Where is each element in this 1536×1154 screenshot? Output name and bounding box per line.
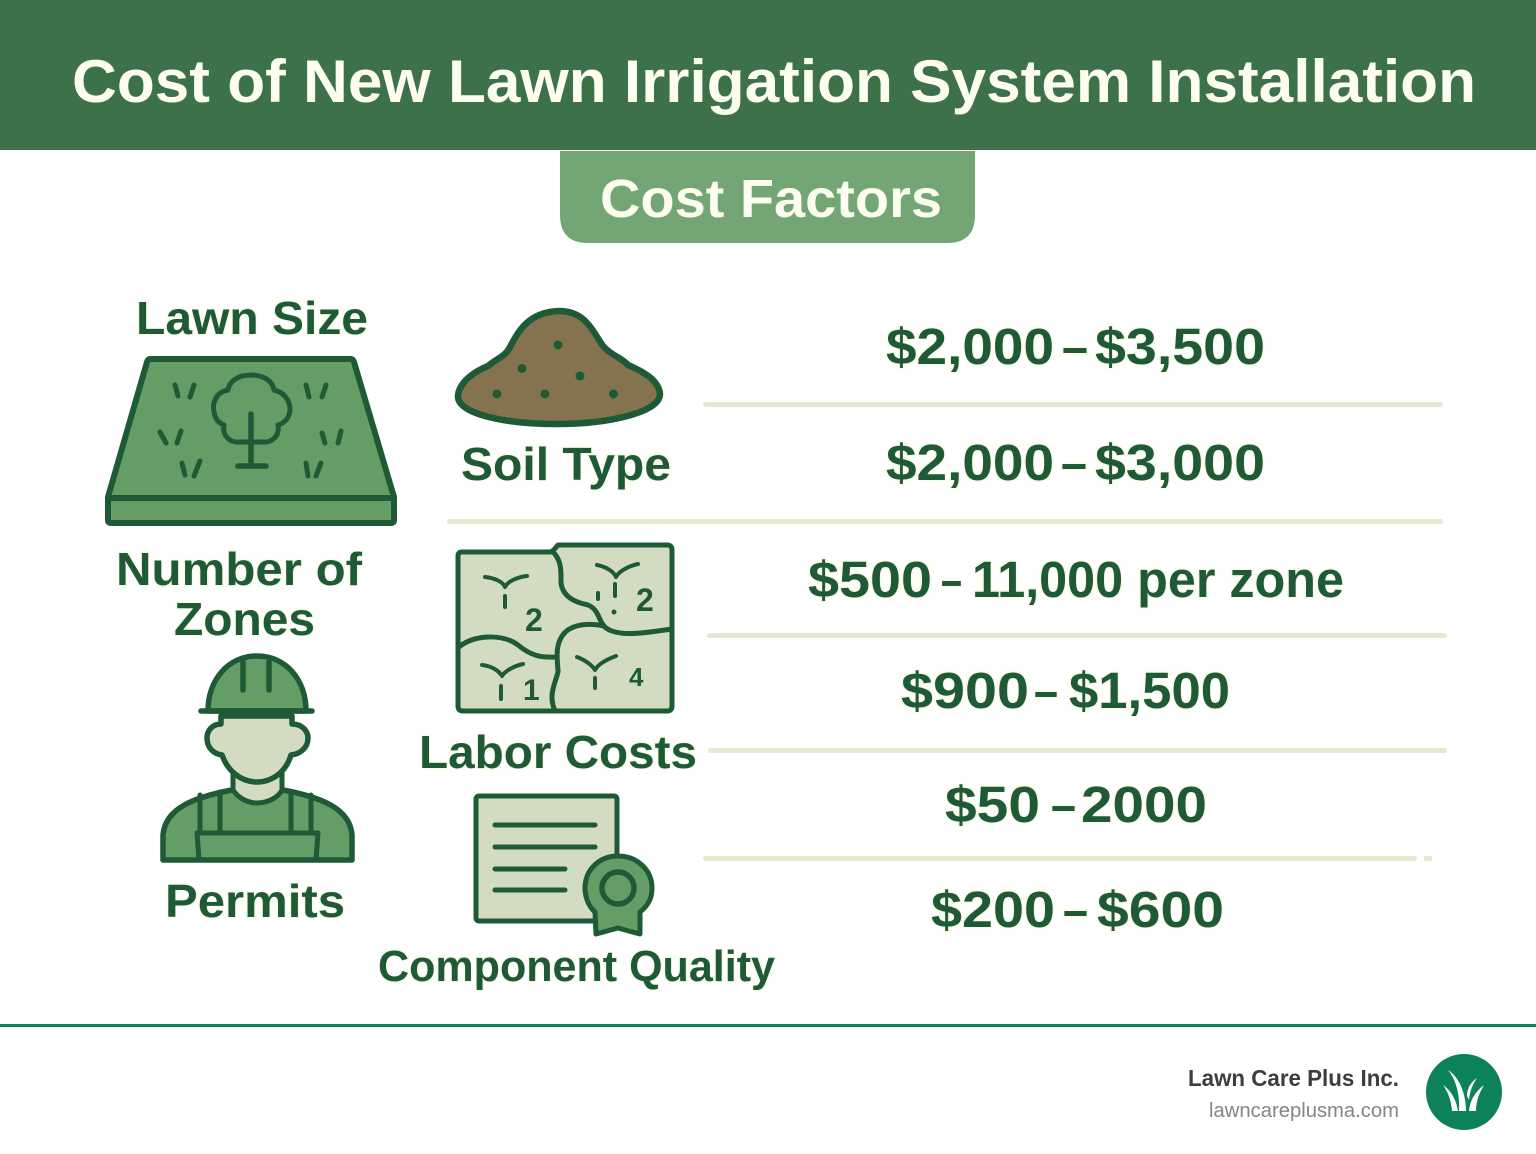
price: component quality: $600 (1097, 881, 1224, 938)
price: number of zones: $500 (808, 551, 932, 608)
icon: zone map (458, 545, 672, 711)
icon: brand logo (1426, 1054, 1502, 1130)
zone numbers: 1 (523, 674, 540, 707)
price: soil type: – (1061, 434, 1087, 491)
zone numbers (523, 582, 654, 707)
price: component quality (931, 881, 1224, 938)
price: labor costs: $900 (901, 662, 1029, 719)
footer brand text: Lawn Care Plus Inc. (1188, 1065, 1399, 1091)
price: lawn size: $3,500 (1095, 318, 1265, 375)
body (163, 790, 352, 860)
label: labor costs: Labor Costs (419, 726, 697, 778)
label: number of zones: Zones (174, 593, 315, 645)
grass tufts (160, 385, 341, 476)
subheading pill: cost factors: Cost Factors (600, 169, 942, 229)
zone numbers: 2 (636, 582, 654, 618)
price: lawn size (886, 318, 1265, 375)
price: number of zones: 11,000 per zone (972, 551, 1344, 608)
price: labor costs: $1,500 (1069, 662, 1230, 719)
price: lawn size: – (1062, 318, 1088, 375)
price: permits (945, 776, 1207, 833)
title: Cost of New Lawn Irrigation System Installation (72, 48, 1476, 115)
label: component quality: Component Quality (378, 942, 776, 991)
price: permits: 2000 (1081, 776, 1207, 833)
subheading pill: cost factors (560, 151, 975, 243)
price: permits: $50 (945, 776, 1040, 833)
price: component quality: $200 (931, 881, 1055, 938)
zone numbers: 4 (629, 662, 644, 692)
icon: certificate with seal (476, 796, 652, 934)
price: permits: – (1051, 776, 1076, 833)
footer brand text (1188, 1065, 1399, 1122)
header banner (0, 0, 1536, 150)
icon: soil pile (458, 311, 660, 424)
price: soil type: $3,000 (1095, 434, 1265, 491)
label: permits: Permits (165, 875, 345, 927)
price: soil type: $2,000 (886, 434, 1054, 491)
price: labor costs: – (1034, 662, 1058, 719)
price: number of zones (808, 551, 1344, 608)
label: number of zones (116, 543, 363, 645)
label: lawn size: Lawn Size (136, 292, 368, 344)
icon: lawn plot with tree (108, 359, 394, 523)
footer brand text: lawncareplusma.com (1209, 1099, 1399, 1122)
label: soil type: Soil Type (461, 438, 671, 490)
price: soil type (886, 434, 1265, 491)
zone sprouts (482, 564, 638, 699)
price: number of zones: – (941, 551, 962, 608)
price: lawn size: $2,000 (886, 318, 1054, 375)
price: component quality: – (1063, 881, 1088, 938)
zone numbers: 2 (525, 602, 543, 638)
price: labor costs (901, 662, 1230, 719)
head (207, 716, 308, 782)
icon: worker with hard hat (163, 656, 352, 860)
hard hat (208, 656, 306, 711)
label: number of zones: Number of (116, 543, 363, 595)
